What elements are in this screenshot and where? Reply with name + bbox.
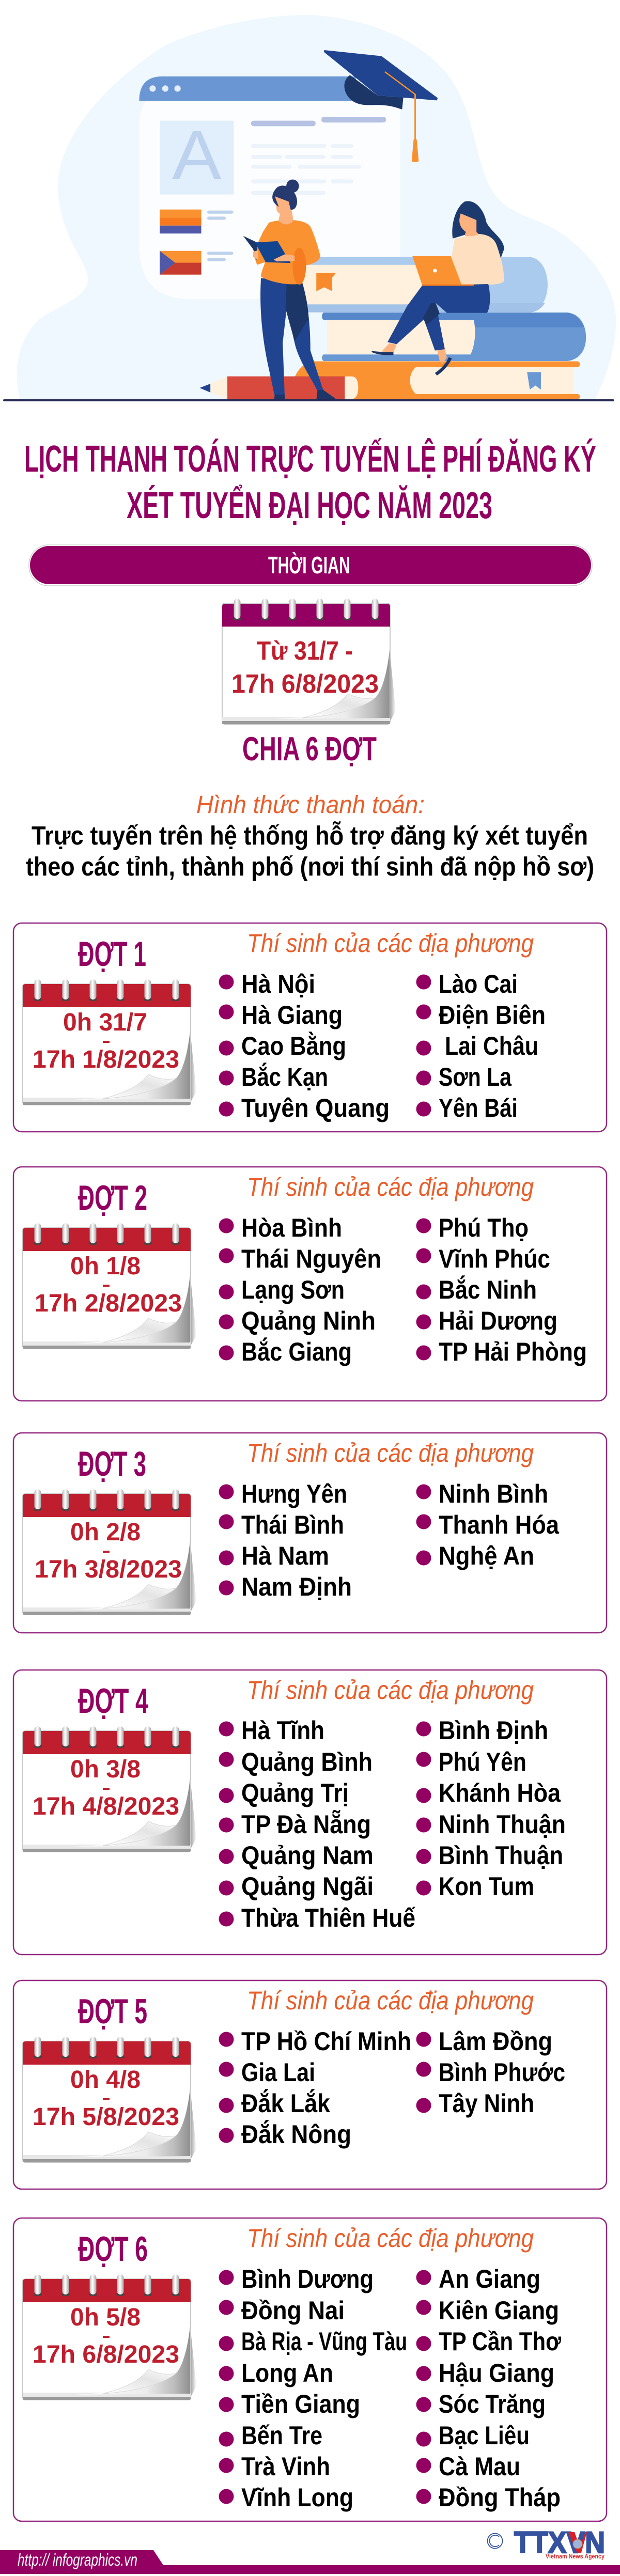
province list: left column: Bắc Kạn [241, 1063, 328, 1091]
province list: left column: Quảng Bình [241, 1747, 373, 1776]
heading: đợt 6: ĐỢT 6 [78, 2229, 148, 2269]
banner: thời gian: THỜI GIAN [268, 552, 350, 579]
heading: đợt 4: ĐỢT 4 [78, 1681, 148, 1721]
logo: ttxvn: Vietnam News Agency [546, 2553, 605, 2560]
calendar: đợt 1 dates [23, 979, 196, 1105]
province list: right column: Phú Yên [439, 1747, 526, 1776]
province list: left column: Long An [241, 2359, 333, 2387]
province list: right column: Vĩnh Phúc [439, 1244, 550, 1273]
province list: right column: TP Hải Phòng [439, 1337, 587, 1366]
province list: right column [416, 2265, 561, 2512]
province list: right column: Kiên Giang [439, 2296, 559, 2325]
text block: payment method: Hình thức thanh toán: [196, 791, 425, 819]
province list: right column: Nghệ An [439, 1541, 534, 1570]
calendar: đợt 3 dates: 0h 2/8 [70, 1519, 141, 1546]
province list: right column [416, 970, 546, 1122]
banner: thời gian [29, 545, 592, 586]
province list: left column: Thái Bình [241, 1510, 344, 1539]
province list: left column: Hà Nam [241, 1541, 329, 1570]
province list: left column: Đồng Nai [241, 2296, 345, 2325]
province list: left column: Quảng Ninh [241, 1306, 376, 1335]
calendar: đợt 5 dates [23, 2037, 196, 2162]
province list: left column: Quảng Ngãi [241, 1872, 374, 1901]
province list: right column: Sóc Trăng [439, 2390, 546, 2418]
province list: left column: Gia Lai [241, 2058, 315, 2087]
illustration: students with books and graduation cap: A [172, 116, 222, 194]
province list: right column: Yên Bái [439, 1094, 518, 1122]
province list: left column: Quảng Trị [241, 1778, 349, 1807]
heading: đợt 5: ĐỢT 5 [78, 1992, 147, 2031]
province list: right column [416, 2027, 565, 2118]
province list: left column: Bến Tre [241, 2421, 322, 2450]
panel: đợt 2 [13, 1167, 607, 1401]
province list: left column: TP Hồ Chí Minh [241, 2027, 411, 2056]
panel: đợt 3 [13, 1433, 607, 1633]
province list: right column: Cà Mau [439, 2452, 520, 2481]
province list: right column [416, 1213, 587, 1366]
province list: right column: Khánh Hòa [439, 1778, 561, 1807]
province list: right column: Sơn La [439, 1063, 512, 1091]
province list: right column: Bình Thuận [439, 1841, 563, 1870]
province list: left column: Hà Giang [241, 1001, 343, 1029]
subheading: candidates by locality: Thí sinh của các địa phương [247, 1676, 534, 1705]
subheading: candidates by locality: Thí sinh của các địa phương [247, 2224, 534, 2253]
calendar: overall period: 17h 6/8/2023 [231, 669, 379, 698]
title [24, 438, 596, 526]
province list: left column [219, 2027, 411, 2149]
province list: right column: Ninh Thuận [439, 1810, 566, 1839]
province list: right column: Điện Biên [439, 1001, 546, 1029]
province list: right column: Lào Cai [439, 970, 518, 998]
province list: left column: Hà Nội [241, 970, 315, 998]
calendar: đợt 2 dates: 0h 1/8 [70, 1253, 141, 1280]
province list: left column: Thừa Thiên Huế [241, 1903, 415, 1932]
province list: right column: Bình Định [439, 1716, 548, 1745]
calendar: overall period [222, 599, 396, 724]
province list: left column [219, 2265, 407, 2512]
calendar: đợt 1 dates: 17h 1/8/2023 [33, 1046, 179, 1073]
province list: left column: Quảng Nam [241, 1841, 374, 1870]
province list: left column: Vĩnh Long [241, 2483, 353, 2512]
logo: ttxvn: TTXVN [514, 2526, 605, 2559]
calendar: đợt 6 dates: 0h 5/8 [70, 2304, 141, 2331]
heading: chia 6 đợt: CHIA 6 ĐỢT [242, 730, 377, 768]
province list: right column: Hải Dương [439, 1306, 557, 1335]
calendar: đợt 4 dates [23, 1726, 196, 1852]
province list: right column: TP Cần Thơ [439, 2327, 561, 2356]
calendar: đợt 4 dates: 0h 3/8 [70, 1756, 141, 1783]
province list: right column: Bắc Ninh [439, 1275, 537, 1304]
province list: right column [416, 1716, 566, 1901]
province list: left column: Tuyên Quang [241, 1094, 390, 1122]
province list: left column [219, 1213, 381, 1366]
province list: left column: Lạng Sơn [241, 1275, 345, 1304]
heading: đợt 1: ĐỢT 1 [78, 934, 146, 974]
panel: đợt 4 [13, 1670, 607, 1955]
calendar: đợt 6 dates [23, 2274, 196, 2400]
province list: right column: Kon Tum [439, 1872, 534, 1901]
province list: left column [219, 1716, 415, 1932]
calendar: đợt 2 dates: 17h 2/8/2023 [35, 1290, 182, 1317]
province list: left column: Tiền Giang [241, 2390, 360, 2418]
province list: left column: Hưng Yên [241, 1479, 347, 1508]
text block: payment method [26, 791, 594, 881]
subheading: candidates by locality: Thí sinh của các địa phương [247, 1986, 534, 2015]
calendar: overall period: Từ 31/7 - [257, 636, 353, 665]
subheading: candidates by locality: Thí sinh của các địa phương [247, 1173, 534, 1201]
calendar: đợt 4 dates: 17h 4/8/2023 [33, 1793, 179, 1820]
icon: copyright mark [488, 2533, 502, 2549]
province list: left column: Bắc Giang [241, 1337, 352, 1366]
province list: left column: TP Đà Nẵng [241, 1809, 371, 1839]
province list: left column [219, 1479, 352, 1601]
panel: đợt 5 [13, 1980, 607, 2189]
illustration: students with books and graduation cap [3, 15, 616, 401]
calendar: đợt 3 dates: 17h 3/8/2023 [35, 1556, 182, 1583]
province list: right column: Thanh Hóa [439, 1510, 560, 1539]
province list: left column: Đắk Lắk [241, 2089, 330, 2118]
calendar: đợt 5 dates: 17h 5/8/2023 [33, 2103, 179, 2131]
province list: left column: Thái Nguyên [241, 1244, 381, 1273]
province list: right column [416, 1479, 560, 1570]
subheading: candidates by locality: Thí sinh của các địa phương [247, 929, 534, 958]
province list: right column: Lai Châu [445, 1032, 538, 1060]
province list: right column: Tây Ninh [439, 2089, 534, 2118]
province list: right column: Bạc Liêu [439, 2421, 530, 2450]
province list: left column: Đắk Nông [241, 2120, 351, 2149]
province list: left column: Bình Dương [241, 2265, 374, 2293]
panel: đợt 1 [13, 923, 607, 1132]
province list: left column: Nam Định [241, 1572, 352, 1601]
calendar: đợt 3 dates [23, 1489, 196, 1615]
province list: left column: Hà Tĩnh [241, 1716, 324, 1745]
province list: left column [219, 970, 390, 1122]
calendar: đợt 6 dates: 17h 6/8/2023 [33, 2341, 179, 2368]
province list: left column: Hòa Bình [241, 1213, 342, 1242]
province list: left column: Cao Bằng [241, 1032, 346, 1060]
footer bar with website link [0, 2550, 620, 2574]
province list: right column: Bình Phước [439, 2058, 565, 2087]
province list: right column: Phú Thọ [439, 1213, 529, 1242]
calendar: đợt 5 dates: 0h 4/8 [70, 2066, 141, 2094]
province list: right column: Đồng Tháp [439, 2483, 561, 2512]
province list: right column: Hậu Giang [439, 2359, 554, 2387]
footer bar with website link: http:// infographics.vn [18, 2550, 137, 2569]
panel: đợt 6 [13, 2218, 607, 2521]
heading: đợt 2: ĐỢT 2 [78, 1178, 147, 1217]
province list: right column: Ninh Bình [439, 1479, 548, 1508]
province list: right column: Lâm Đồng [439, 2027, 552, 2056]
calendar: đợt 1 dates: 0h 31/7 [63, 1009, 147, 1036]
heading: đợt 3: ĐỢT 3 [78, 1444, 146, 1484]
calendar: đợt 2 dates [23, 1223, 196, 1349]
subheading: candidates by locality: Thí sinh của các địa phương [247, 1439, 534, 1467]
province list: left column: Trà Vinh [241, 2452, 330, 2481]
province list: right column: An Giang [439, 2265, 540, 2293]
province list: left column: Bà Rịa - Vũng Tàu [241, 2327, 407, 2356]
